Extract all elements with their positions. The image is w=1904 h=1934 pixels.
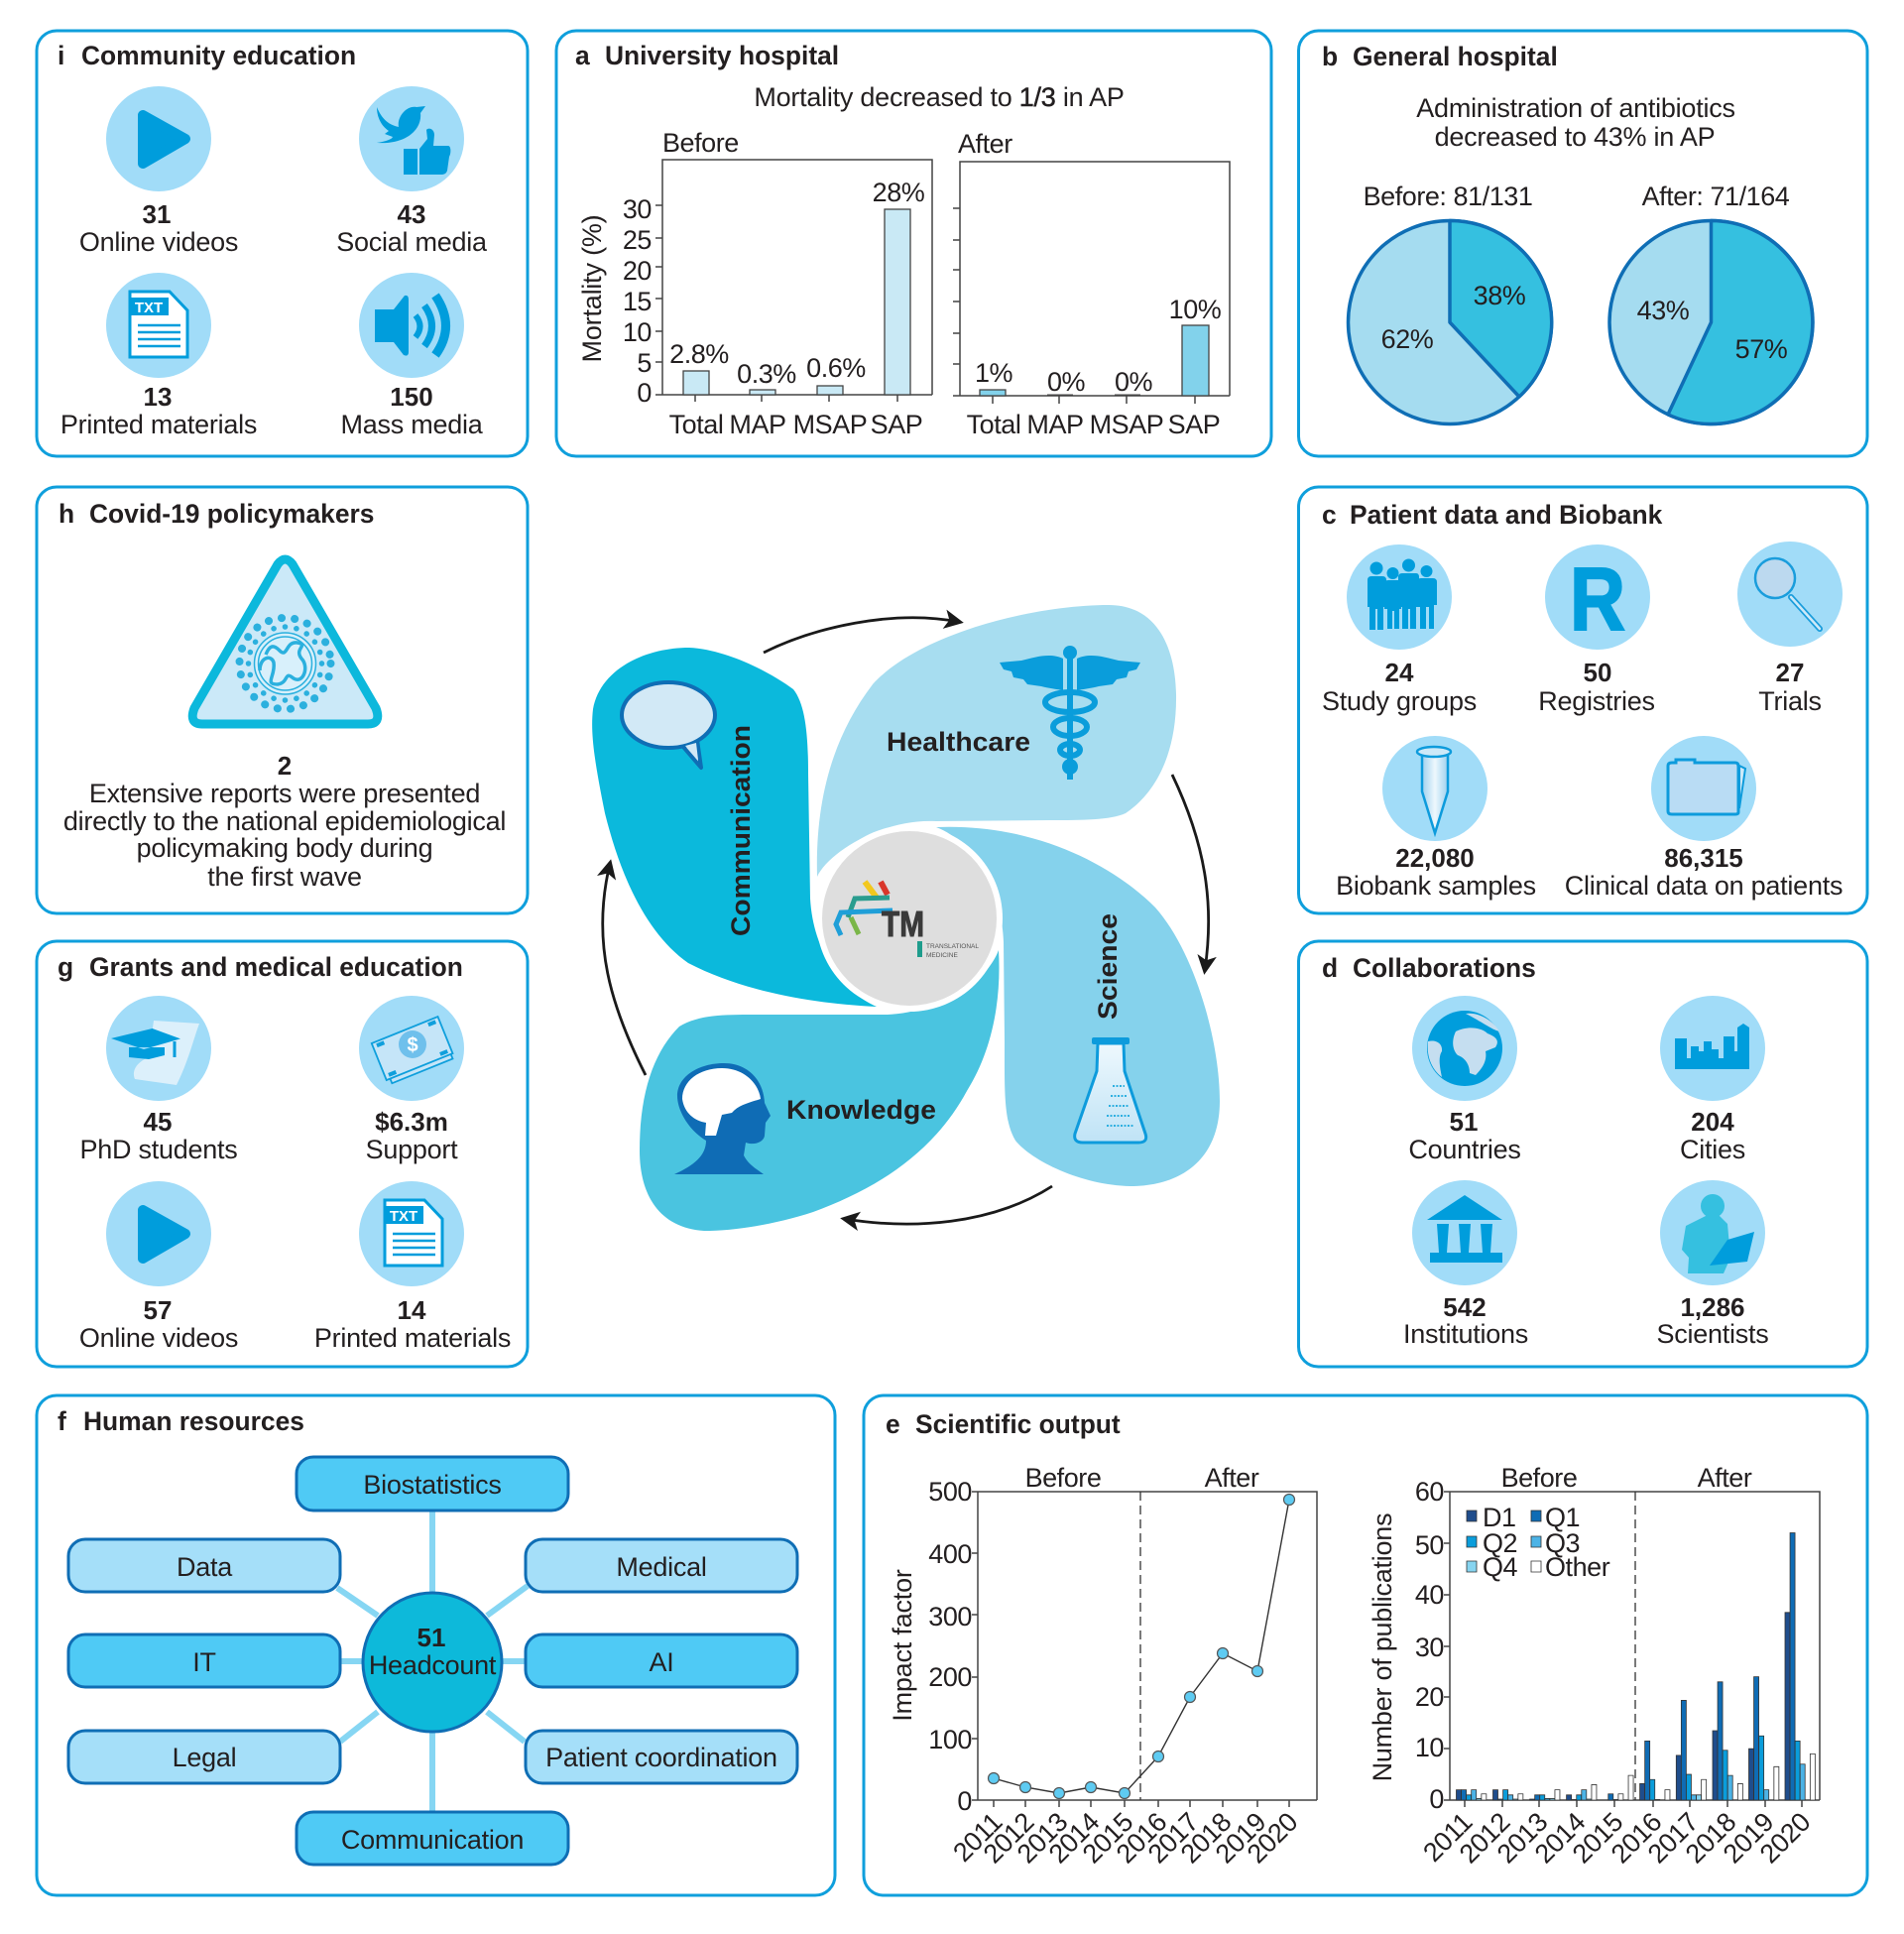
heading: b	[1322, 42, 1338, 71]
panel frame	[37, 941, 528, 1367]
icon: trials magnifier	[1737, 542, 1843, 647]
bar chart: number of publications: 2013	[1491, 1807, 1553, 1869]
icon: printed materials	[359, 1181, 464, 1286]
line chart: impact factor: 2019	[1210, 1807, 1271, 1869]
petal: communication: Communication	[726, 725, 756, 936]
bar chart: number of publications: 2020	[1754, 1807, 1816, 1869]
icon: banknotes: $	[407, 1034, 418, 1056]
panel a: university hospital	[556, 31, 1271, 456]
bar chart: after	[953, 129, 1230, 439]
icon: printed materials: TXT	[390, 1208, 417, 1225]
bar chart: number of publications: 2019	[1718, 1807, 1779, 1869]
node: data: Data	[177, 1552, 233, 1582]
stat: phd students: PhD students	[79, 1135, 238, 1164]
line chart: impact factor: 2018	[1175, 1807, 1237, 1869]
petal: communication	[592, 648, 877, 1007]
arrow: science to knowledge	[845, 1186, 1052, 1224]
stat: registries: Registries	[1538, 686, 1655, 716]
logo: translational medicine	[816, 825, 1003, 1012]
line chart: impact factor: 2017	[1142, 1807, 1204, 1869]
stat: support: $6.3m	[375, 1107, 448, 1137]
icon: online videos	[106, 86, 211, 191]
centre: headcount: Headcount	[369, 1650, 497, 1680]
stat: printed materials: Printed materials	[314, 1323, 511, 1353]
node: medical: Medical	[616, 1552, 707, 1582]
line chart: impact factor: 100	[928, 1725, 972, 1754]
panel h: covid-19 policymakers	[37, 487, 528, 913]
central cycle diagram	[592, 605, 1220, 1231]
line chart: impact factor: 2012	[978, 1807, 1039, 1869]
bar chart: before: 2.8%	[669, 339, 729, 369]
stat: biobank samples: Biobank samples	[1336, 871, 1536, 901]
node: communication: Communication	[341, 1825, 524, 1855]
icon: globe	[1412, 996, 1517, 1101]
node: it	[68, 1634, 340, 1687]
node: communication	[297, 1812, 568, 1865]
panel g: grants and medical education	[37, 941, 528, 1367]
heading: i	[58, 41, 64, 70]
line chart: impact factor: 300	[928, 1602, 972, 1632]
arrow: healthcare to science	[1172, 775, 1209, 970]
panel e: scientific output	[864, 1395, 1867, 1895]
bar chart: number of publications: After	[1698, 1463, 1752, 1493]
icon: printed materials: TXT	[135, 300, 163, 316]
centre: headcount	[363, 1593, 502, 1732]
bar chart: before: Total	[669, 410, 723, 439]
line chart: impact factor	[888, 1463, 1317, 1869]
line chart: impact factor: 2020	[1242, 1807, 1303, 1869]
heading: Collaborations	[1353, 953, 1536, 983]
bar chart: before: Before	[662, 128, 739, 158]
petal: healthcare: Healthcare	[887, 727, 1030, 757]
bar chart: before: 0.3%	[737, 359, 796, 389]
bar chart: before: MSAP	[793, 410, 867, 439]
report statement: policymaking body during	[137, 833, 432, 863]
icon: graduation cap	[106, 996, 211, 1101]
stat: clinical data: 86,315	[1664, 843, 1743, 873]
connector lines	[337, 1511, 528, 1812]
legend: D1	[1483, 1503, 1516, 1532]
icon: study groups	[1347, 544, 1452, 650]
bar chart: before: Mortality (%)	[577, 215, 607, 362]
pie chart: after: 57%	[1735, 334, 1788, 364]
icon: virus warning triangle	[192, 559, 378, 724]
bar chart: number of publications: Number of publications	[1368, 1513, 1397, 1781]
panel b: general hospital	[1299, 31, 1867, 456]
node: patient coordination	[526, 1731, 797, 1783]
panel d: collaborations	[1299, 941, 1867, 1367]
stat: study groups: 24	[1385, 658, 1414, 687]
panel f: human resources	[37, 1395, 835, 1895]
bar chart: after: SAP	[1168, 410, 1220, 439]
pie chart: before	[1349, 181, 1552, 424]
heading: h	[59, 499, 74, 529]
stat: countries: 51	[1450, 1107, 1478, 1137]
heading: University hospital	[605, 41, 839, 70]
stat: cities: Cities	[1680, 1135, 1745, 1164]
node: biostatistics: Biostatistics	[363, 1470, 502, 1500]
bar chart: before	[577, 128, 932, 439]
bar chart: before: 5	[637, 348, 652, 378]
icon: scientists	[1660, 1180, 1765, 1285]
bar chart: number of publications: 2014	[1529, 1807, 1592, 1869]
stat: online videos: Online videos	[79, 1323, 238, 1353]
bar chart: before: 20	[623, 256, 652, 286]
line chart: impact factor: After	[1205, 1463, 1259, 1493]
heading: Grants and medical education	[89, 952, 463, 982]
bar chart: number of publications: 2017	[1642, 1807, 1704, 1869]
node: ai: AI	[649, 1647, 674, 1677]
line chart: impact factor: Before	[1025, 1463, 1101, 1493]
icon: registries: R	[1570, 550, 1625, 650]
pie chart: before: 38%	[1474, 281, 1526, 310]
stat: clinical data: Clinical data on patients	[1565, 871, 1843, 901]
panel frame	[556, 31, 1271, 456]
petal: science	[936, 827, 1220, 1186]
bar chart: after: 0%	[1047, 367, 1086, 397]
bar chart: before: 10	[623, 317, 652, 347]
bar chart: number of publications: 50	[1415, 1530, 1444, 1560]
panel frame	[1299, 941, 1867, 1367]
stat: biobank samples: 22,080	[1395, 843, 1475, 873]
petal: science: Science	[1093, 913, 1123, 1020]
node: legal	[68, 1731, 340, 1783]
panel frame	[37, 487, 528, 913]
report statement: the first wave	[207, 862, 362, 892]
bar chart: after: After	[958, 129, 1012, 159]
node: patient coordination: Patient coordination	[545, 1743, 777, 1772]
heading: Covid-19 policymakers	[89, 499, 375, 529]
legend: Q4	[1483, 1552, 1518, 1582]
icon: institutions	[1412, 1180, 1517, 1285]
line chart: impact factor: 400	[928, 1539, 972, 1569]
legend	[1467, 1503, 1610, 1582]
bar chart: before: 30	[623, 194, 652, 224]
node: legal: Legal	[173, 1743, 236, 1772]
centre: headcount: 51	[417, 1623, 445, 1652]
arrow: communication to healthcare	[764, 618, 959, 653]
pie chart: after	[1609, 181, 1813, 424]
bar chart: before: 0	[637, 378, 652, 408]
line chart: impact factor: 2013	[1012, 1807, 1073, 1869]
bar chart: before: 25	[623, 225, 652, 255]
bar chart: after: Total	[967, 410, 1020, 439]
node: biostatistics	[297, 1457, 568, 1511]
bar chart: number of publications: 2015	[1567, 1807, 1628, 1869]
stat: cities: 204	[1691, 1107, 1734, 1137]
heading: Community education	[81, 41, 356, 70]
node: it: IT	[192, 1647, 216, 1677]
icon: printed materials	[106, 273, 211, 378]
bar chart: number of publications: 30	[1415, 1632, 1444, 1662]
bar chart: before: MAP	[729, 410, 786, 439]
pie chart: after: 43%	[1637, 296, 1690, 325]
stat: support: Support	[366, 1135, 458, 1164]
stat: online videos: Online videos	[79, 227, 238, 257]
bar chart: before: 0.6%	[806, 353, 866, 383]
stat: trials: Trials	[1758, 686, 1822, 716]
bar chart: after: 0%	[1115, 367, 1153, 397]
heading: General hospital	[1353, 42, 1558, 71]
subtitle: Administration of antibiotics	[1416, 93, 1735, 123]
stat: mass media: 150	[390, 382, 433, 412]
stat: printed materials: 13	[144, 382, 172, 412]
stat: printed materials: Printed materials	[60, 410, 257, 439]
stat: study groups: Study groups	[1322, 686, 1477, 716]
stat: online videos: 57	[144, 1295, 172, 1325]
line chart: impact factor: 2011	[947, 1807, 1008, 1868]
stat: printed materials: 14	[398, 1295, 426, 1325]
bar chart: number of publications: 2016	[1606, 1807, 1667, 1869]
subtitle: decreased to 43% in AP	[1435, 122, 1715, 152]
stat: countries: Countries	[1408, 1135, 1521, 1164]
stat: online videos: 31	[143, 199, 171, 229]
logo: translational medicine: TRANSLATIONAL	[926, 943, 979, 950]
bar chart: number of publications: 2018	[1680, 1807, 1741, 1869]
bar chart: after: 10%	[1169, 295, 1222, 324]
bar chart: number of publications: 20	[1415, 1682, 1444, 1712]
logo: translational medicine: TM	[882, 904, 924, 944]
legend: Q1	[1545, 1503, 1580, 1532]
pie chart: before: Before: 81/131	[1364, 181, 1532, 211]
bar chart: after: MSAP	[1090, 410, 1163, 439]
report statement: 2	[278, 751, 292, 781]
icon: social media	[359, 86, 464, 191]
stat: scientists: Scientists	[1656, 1319, 1769, 1349]
line chart: impact factor: 500	[928, 1477, 972, 1507]
heading: f	[58, 1406, 66, 1436]
panel frame	[37, 1395, 835, 1895]
stat: institutions: Institutions	[1403, 1319, 1528, 1349]
heading: Human resources	[83, 1406, 304, 1436]
petal: knowledge	[640, 950, 1000, 1231]
node: data	[68, 1539, 340, 1592]
icon: clinical data folder	[1651, 736, 1756, 841]
heading: e	[886, 1409, 900, 1439]
line chart: impact factor: 2016	[1111, 1807, 1172, 1869]
pie chart: before: 62%	[1381, 324, 1434, 354]
line chart: impact factor: 0	[957, 1786, 972, 1816]
report statement: directly to the national epidemiological	[63, 806, 506, 836]
bar chart: number of publications: 60	[1415, 1477, 1444, 1507]
bar chart: number of publications: 10	[1415, 1733, 1444, 1762]
arrow: knowledge to communication	[603, 864, 646, 1075]
bar chart: number of publications	[1368, 1463, 1820, 1869]
logo: translational medicine: MEDICINE	[926, 952, 958, 959]
line chart: impact factor: Impact factor	[888, 1569, 917, 1722]
stat: social media: Social media	[336, 227, 488, 257]
petal: knowledge: Knowledge	[786, 1095, 936, 1125]
panel c: patient data and biobank	[1299, 487, 1867, 913]
line chart: impact factor: 2015	[1077, 1807, 1138, 1869]
heading: Scientific output	[915, 1409, 1121, 1439]
legend: Q3	[1545, 1528, 1580, 1558]
panel frame	[1299, 487, 1867, 913]
icon: banknotes	[359, 996, 464, 1101]
bar chart: after: 1%	[975, 358, 1013, 388]
bar chart: number of publications: 2011	[1417, 1807, 1478, 1868]
icon: mass media	[359, 273, 464, 378]
panel frame	[1299, 31, 1867, 456]
petal: healthcare	[817, 605, 1176, 877]
bar chart: before: 15	[623, 287, 652, 316]
icon: registries	[1545, 544, 1650, 650]
heading: g	[58, 952, 73, 982]
legend: Other	[1545, 1552, 1610, 1582]
heading: Patient data and Biobank	[1350, 500, 1663, 530]
stat: social media: 43	[398, 199, 425, 229]
line chart: impact factor: 2014	[1043, 1807, 1106, 1869]
bar chart: after: MAP	[1026, 410, 1084, 439]
bar chart: number of publications: Before	[1501, 1463, 1577, 1493]
report statement: Extensive reports were presented	[89, 779, 480, 808]
bar chart: number of publications: 40	[1415, 1580, 1444, 1610]
pie chart: after: After: 71/164	[1642, 181, 1790, 211]
bar chart: number of publications: 0	[1429, 1784, 1444, 1814]
icon: biobank tube	[1382, 736, 1488, 841]
stat: phd students: 45	[144, 1107, 172, 1137]
subtitle: Mortality decreased to 1/3 in AP	[754, 82, 1125, 112]
stat: scientists: 1,286	[1680, 1292, 1745, 1322]
line chart: impact factor: 200	[928, 1662, 972, 1692]
heading: a	[575, 41, 590, 70]
panel frame	[864, 1395, 1867, 1895]
legend: Q2	[1483, 1528, 1517, 1558]
icon: cities skyline	[1660, 996, 1765, 1101]
heading: c	[1322, 500, 1337, 530]
stat: registries: 50	[1584, 658, 1611, 687]
stat: mass media: Mass media	[340, 410, 484, 439]
bar chart: number of publications: 2012	[1454, 1807, 1515, 1869]
node: medical	[526, 1539, 797, 1592]
stat: institutions: 542	[1443, 1292, 1487, 1322]
node: ai	[526, 1634, 797, 1687]
icon: online videos	[106, 1181, 211, 1286]
panel frame	[37, 31, 528, 456]
bar chart: before: 28%	[873, 178, 925, 207]
stat: trials: 27	[1776, 658, 1804, 687]
bar chart: before: SAP	[871, 410, 922, 439]
heading: d	[1322, 953, 1338, 983]
panel i: community education	[37, 31, 528, 456]
